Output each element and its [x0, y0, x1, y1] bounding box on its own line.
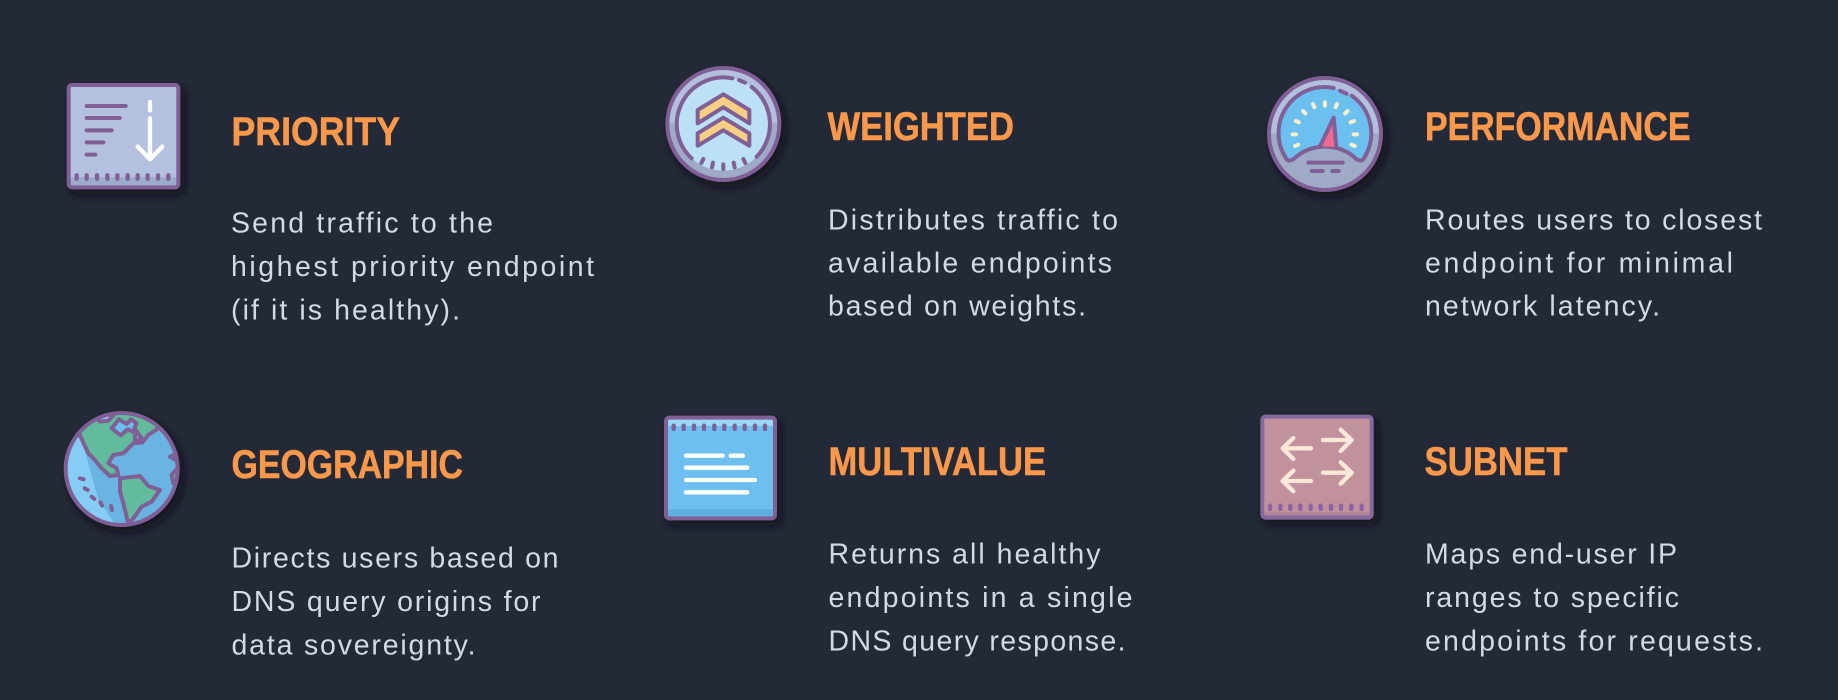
- text: weighted description: based on weights.: [828, 290, 1086, 322]
- heading: subnet: SUBNET: [1424, 440, 1568, 484]
- text: multivalue description: [828, 538, 1132, 658]
- text: performance description: Routes users to closest: [1425, 204, 1762, 236]
- text: priority description: Send traffic to the: [231, 208, 493, 240]
- heading: weighted: WEIGHTED: [828, 105, 1014, 149]
- panel: geographic: [62, 407, 558, 662]
- text: subnet description: endpoints for requests.: [1425, 626, 1763, 658]
- text: performance description: network latency.: [1425, 290, 1660, 322]
- text: subnet description: [1425, 538, 1763, 658]
- text: multivalue description: DNS query response.: [828, 626, 1126, 658]
- text: weighted description: [828, 204, 1118, 322]
- text: geographic description: DNS query origins for: [232, 586, 541, 618]
- panel: subnet: [1262, 417, 1763, 658]
- icon: opposing arrows: [1262, 417, 1372, 518]
- text: priority description: (if it is healthy).: [231, 294, 460, 326]
- text: weighted description: available endpoints: [828, 248, 1112, 280]
- text: geographic description: [232, 542, 558, 662]
- text: performance description: endpoint for minimal: [1425, 248, 1733, 280]
- text: multivalue description: endpoints in a single: [828, 582, 1132, 614]
- icon: speedometer gauge: [1265, 78, 1385, 193]
- text: geographic description: data sovereignty.: [232, 630, 476, 662]
- text: weighted description: Distributes traffic to: [828, 204, 1118, 236]
- text: subnet description: Maps end-user IP: [1425, 538, 1677, 570]
- text: performance description: [1425, 204, 1762, 322]
- text: geographic description: Directs users based on: [232, 542, 558, 574]
- heading: performance: PERFORMANCE: [1425, 105, 1690, 149]
- text: multivalue description: Returns all healthy: [828, 538, 1101, 570]
- icon: double chevron medallion: [665, 68, 782, 183]
- icon: globe: [62, 407, 182, 528]
- panel: weighted: [665, 68, 1118, 322]
- heading: multivalue: MULTIVALUE: [828, 440, 1046, 484]
- text: priority description: highest priority endpoint: [231, 251, 594, 283]
- text: subnet description: ranges to specific: [1425, 582, 1679, 614]
- panel: priority: [69, 85, 594, 326]
- panel: performance: [1265, 78, 1762, 322]
- icon: notepad with text lines: [666, 418, 775, 518]
- heading: priority: PRIORITY: [232, 110, 400, 154]
- panel: multivalue: [666, 418, 1132, 658]
- text: priority description: [231, 208, 594, 326]
- heading: geographic: GEOGRAPHIC: [232, 443, 463, 487]
- icon: priority list with down arrow: [69, 85, 178, 187]
